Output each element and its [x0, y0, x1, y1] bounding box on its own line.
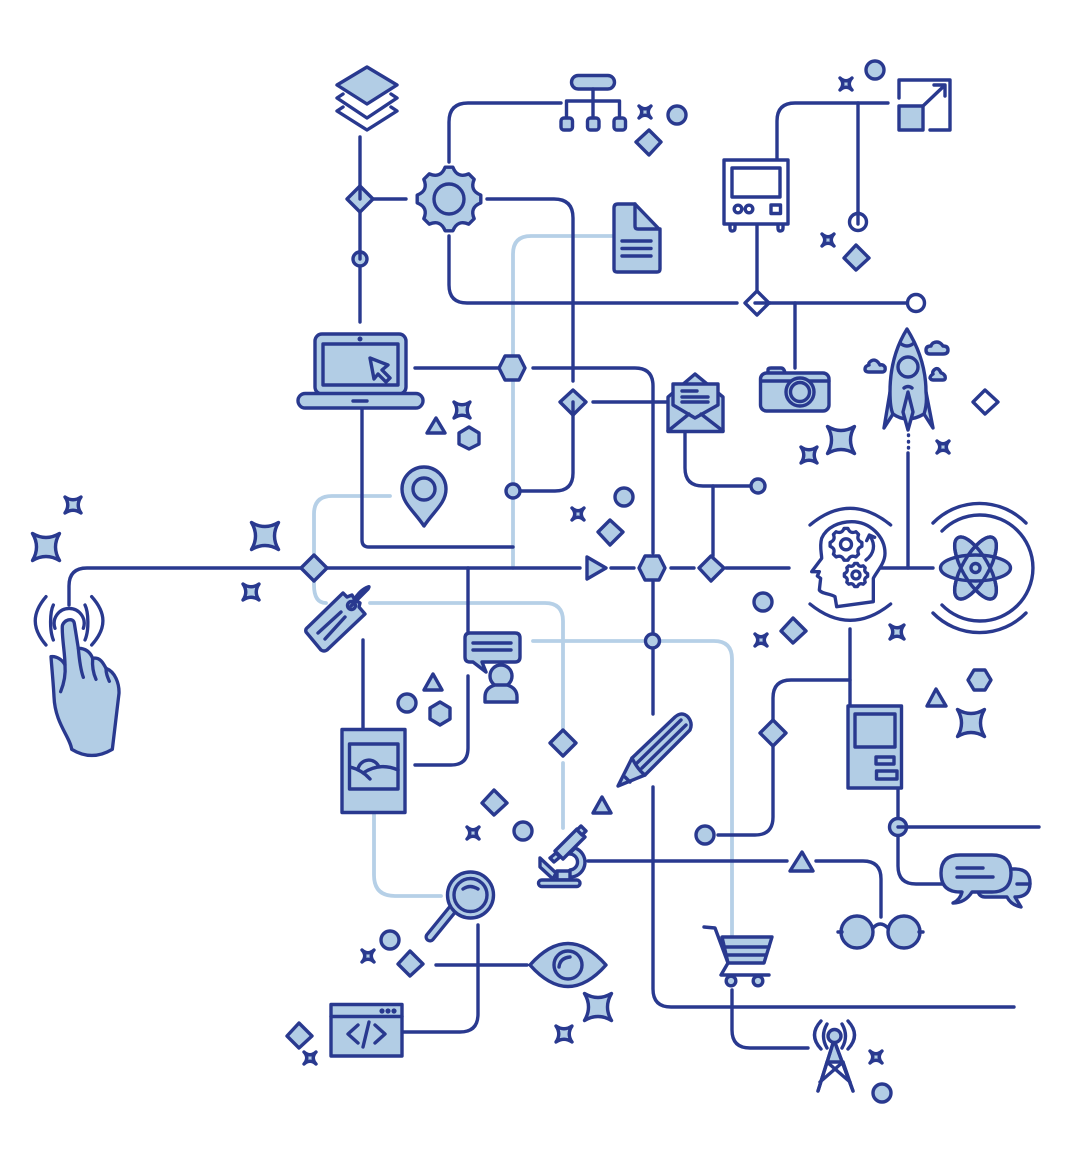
decorative diamonds [287, 130, 869, 1048]
end node: circle [696, 826, 714, 844]
icon: microscope [538, 826, 586, 886]
icon: hand touching with signal waves [35, 597, 119, 755]
junction node: white diamond [745, 291, 769, 315]
icon: pencil [618, 714, 691, 786]
icon: org chart [561, 76, 626, 130]
decorative sparkles: small [65, 78, 949, 1064]
junction node: circle on left column [353, 252, 367, 266]
dark blue connector lines [69, 103, 1039, 1048]
junction stub in white diamond [755, 301, 770, 305]
icon: laptop [298, 334, 423, 408]
junction stubs on left column [358, 186, 362, 259]
junction node: small circle [506, 484, 520, 498]
junction node: circle under kiosk [890, 818, 906, 836]
icon: camera [760, 368, 829, 411]
icon: shopping cart [704, 927, 772, 986]
decorative hexagons [430, 427, 991, 725]
stub in white circle [856, 212, 860, 224]
icon: gear [417, 167, 481, 231]
icon: rocket with clouds [865, 329, 948, 448]
triangle on microscope line [790, 852, 813, 871]
junction node: diamond by envelope [560, 390, 586, 415]
junction node: diamond on light line [550, 730, 576, 756]
junction node: hexagon on main line [639, 556, 665, 580]
play triangle on main line [587, 557, 606, 579]
junction node: main diamond left [301, 555, 327, 581]
icon: glasses [838, 916, 923, 948]
decorative triangles [424, 418, 946, 813]
icon: code window [331, 1004, 402, 1056]
decorative white diamond [973, 390, 998, 414]
junction node: circle on vertical [646, 634, 660, 648]
junction node: diamond on left column [347, 186, 373, 212]
decorative sparkles: large [32, 426, 984, 1020]
icon: picture card [342, 730, 405, 812]
icon: envelope [668, 374, 723, 432]
junction node: small circle by envelope [751, 479, 765, 493]
icon: kiosk terminal [848, 706, 902, 788]
junction stub in diamond [571, 402, 575, 415]
icon: radio tower [814, 1021, 854, 1091]
icon: document [614, 204, 660, 272]
icon: price tag [306, 587, 369, 651]
icon: speech bubble with person [465, 633, 520, 702]
decorative circles [381, 61, 891, 1102]
light blue connector lines [314, 236, 732, 935]
icon: eye [530, 944, 606, 986]
junction node: hexagon under laptop line [499, 356, 525, 380]
icon: layers [337, 67, 397, 130]
stub in junction circle [898, 825, 905, 829]
icon: double chat bubbles [941, 855, 1030, 907]
junction node: diamond on main line [699, 556, 724, 581]
icon: atom with orbit arcs [933, 503, 1033, 633]
icon: monitor device [724, 160, 788, 231]
icon: expand [899, 80, 950, 130]
end node: white circle [908, 294, 924, 312]
junction node: diamond on right vertical [760, 720, 786, 746]
icon: magnifying glass [430, 872, 494, 937]
icon: human head with gears [810, 508, 891, 620]
end node: white circle under expand line [850, 214, 866, 230]
icon: location pin [402, 467, 446, 526]
